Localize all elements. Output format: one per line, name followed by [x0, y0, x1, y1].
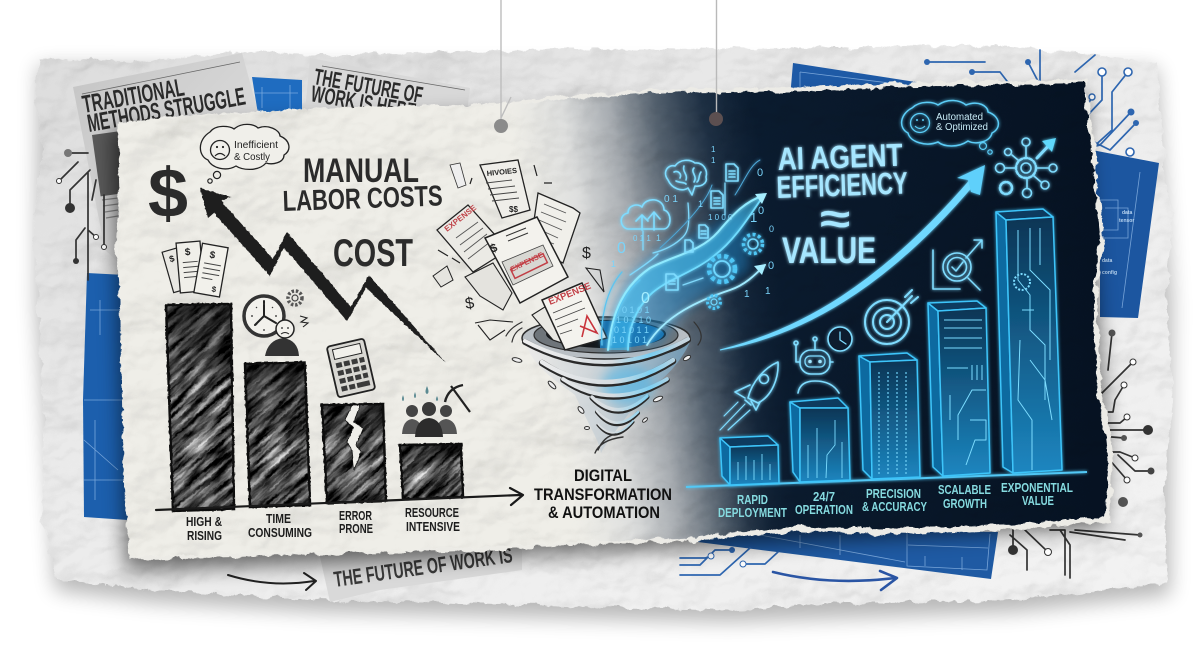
binary digits	[611, 145, 774, 345]
newspaper: bottom future of work: THE FUTURE OF WORK IS	[332, 542, 514, 592]
thought bubble: inefficient and costly: Inefficient	[234, 140, 278, 151]
newspaper: the future of work is here: THE FUTURE OF	[312, 63, 425, 108]
hanging string and pin: right	[709, 0, 723, 126]
bar labels: GROWTH	[943, 496, 987, 511]
paper: invoice	[480, 160, 530, 218]
bar labels	[718, 480, 1073, 520]
binary digits: 1 0 1 0 1	[612, 335, 647, 345]
binary digits: 1	[698, 199, 703, 209]
bar labels: RAPID	[737, 492, 768, 507]
binary digits: 0 1	[664, 194, 678, 205]
funnel debris	[512, 354, 691, 430]
paper: behind funnel expense	[532, 305, 568, 345]
binary digits: 0 1 0 1	[622, 305, 650, 315]
axis labels: RISING	[187, 528, 222, 543]
blueprint: top middle	[252, 77, 302, 114]
tornado funnel	[506, 317, 701, 453]
binary digits: 1 0 1 1 0	[616, 315, 651, 325]
paper: plain document	[530, 193, 580, 263]
icon: cloud upload	[621, 200, 670, 230]
paper: center expense table: $	[488, 240, 500, 256]
binary digits: 1	[656, 233, 661, 243]
binary digits: 1	[611, 259, 616, 269]
binary digits: 1 0 0 0	[708, 213, 733, 222]
funnel rings	[506, 322, 701, 453]
arrow: bottom blue	[773, 571, 897, 590]
icon: dollar small left: $	[464, 295, 476, 313]
icon: receipts: $	[184, 247, 191, 258]
title: ai agent efficiency value: EFFICIENCY	[776, 165, 908, 205]
blueprint: right: data	[1102, 258, 1112, 264]
axis labels	[186, 505, 460, 543]
bar: precision and accuracy	[859, 353, 920, 479]
thought bubble: automated and optimized: & Optimized	[936, 122, 988, 133]
circuit traces: bottom blue	[680, 547, 778, 575]
axis labels: HIGH &	[186, 514, 222, 529]
icons: documents	[666, 164, 738, 290]
paper: center expense table	[485, 217, 568, 303]
binary digits: 0	[768, 260, 774, 272]
blue core glow	[602, 365, 654, 405]
newspaper: the future of work is here: WORK IS HERE	[309, 80, 418, 124]
circuit traces: left	[56, 149, 106, 280]
axis line	[686, 472, 1087, 487]
newspaper: traditional methods struggle: METHODS STRUGGLE	[85, 83, 248, 138]
label: digital transformation and automation: DIGITAL	[574, 466, 632, 485]
axis labels: PRONE	[339, 521, 373, 536]
stream arrowheads	[755, 193, 767, 204]
title: manual labor costs: MANUAL	[303, 152, 419, 190]
icon: magnifier analytics	[933, 240, 982, 290]
icon: calculator	[327, 338, 375, 398]
paper: invoice: HIVOIES	[486, 166, 517, 178]
thought bubble: automated and optimized: Automated	[936, 112, 983, 123]
main paper shadow	[112, 90, 1108, 570]
bar chart: manual labor costs	[154, 302, 524, 540]
paper: behind	[465, 263, 512, 310]
bar: exponential value	[996, 209, 1062, 473]
papers: falling invoices and expenses	[433, 160, 607, 350]
funnel rim	[522, 317, 690, 359]
newspaper: traditional methods struggle: TRADITIONAL	[80, 73, 186, 119]
binary digits: 0	[617, 240, 626, 257]
binary digits: 0 1 0 1 1	[614, 325, 649, 335]
blueprint: top right	[790, 63, 935, 98]
bar: scalable growth	[928, 301, 990, 476]
icon: ai network with arrow	[996, 138, 1057, 198]
icon: receipts	[162, 241, 228, 297]
arrow: bottom black	[228, 573, 316, 590]
bar labels: VALUE	[1022, 493, 1054, 508]
funnel body	[526, 342, 690, 453]
blueprint: left	[83, 273, 128, 520]
thought bubble: automated and optimized	[902, 100, 998, 154]
blueprint: bottom	[680, 528, 998, 579]
bar: rapid deployment	[720, 436, 779, 485]
title: ai agent efficiency value	[776, 137, 908, 271]
icon: target with dart	[865, 290, 918, 344]
icon: receipts: $	[168, 253, 176, 264]
bar: 24/7 operation	[790, 398, 850, 482]
stream glow backdrop	[604, 205, 750, 350]
title: manual labor costs: LABOR COSTS	[282, 180, 443, 218]
icons: gears	[708, 234, 762, 308]
icon: dollar sign: $	[148, 154, 188, 232]
bar chart: ai value	[686, 209, 1087, 520]
label: digital transformation and automation	[534, 466, 672, 522]
paper: invoice: $$	[509, 205, 518, 214]
binary digits: 0	[757, 167, 763, 179]
stream lines	[602, 160, 765, 350]
bar: resource intensive	[398, 442, 465, 501]
icon: receipts: $	[209, 250, 216, 262]
stream band	[608, 195, 764, 350]
icon: receipts: $	[211, 285, 217, 294]
title: ai agent efficiency value: ≈	[820, 195, 850, 242]
binary digits: 0 1 1	[633, 234, 651, 243]
icon: workers with pickaxe	[402, 385, 470, 437]
icon: rocket	[720, 362, 778, 430]
panel: main torn paper edge	[116, 79, 1113, 560]
binary digits: 1	[711, 145, 716, 154]
axis labels: CONSUMING	[248, 525, 312, 540]
bar: error prone	[320, 402, 388, 505]
circuit traces: right dark	[1008, 330, 1154, 578]
axis arrow	[156, 488, 523, 510]
binary digits: 1	[744, 289, 750, 300]
title: ai agent efficiency value: AI AGENT	[777, 137, 904, 177]
bar labels: OPERATION	[795, 502, 853, 517]
binary digits: 0	[641, 290, 650, 307]
label: digital transformation and automation: & AUTOMATION	[548, 503, 660, 522]
icon: brain	[666, 160, 706, 195]
bar labels: DEPLOYMENT	[718, 505, 787, 520]
binary digits: 0	[758, 205, 764, 217]
blueprint: right: config	[1102, 270, 1117, 276]
blueprint: right: data	[1122, 210, 1132, 216]
paper: expense bottom	[542, 281, 607, 350]
axis labels: INTENSIVE	[406, 519, 460, 534]
axis labels: RESOURCE	[405, 505, 459, 520]
paper: expense bottom: EXPENSE	[547, 281, 593, 308]
paper: expense left: EXPENSE	[443, 203, 479, 234]
bar labels: SCALABLE	[938, 482, 991, 497]
bar labels: & ACCURACY	[862, 499, 927, 514]
bar labels: EXPONENTIAL	[1001, 480, 1073, 495]
blueprint: right	[1092, 150, 1159, 318]
bar labels: 24/7	[813, 489, 835, 504]
arrow: rising value curve	[720, 165, 985, 350]
hanging string and pin: left	[494, 0, 511, 133]
bar: high and rising	[164, 302, 236, 513]
blueprint: right: tensor	[1119, 218, 1134, 224]
panel: main paper gradient	[110, 80, 1120, 570]
icon: robot with clock	[794, 327, 852, 393]
title: ai agent efficiency value: VALUE	[782, 230, 876, 271]
binary digits: 1	[765, 286, 771, 297]
icon: clock with worried person	[244, 291, 308, 356]
paper: expense left	[437, 203, 500, 272]
axis labels: TIME	[266, 511, 291, 526]
axis labels: ERROR	[339, 508, 372, 523]
circuit traces: top right blue	[924, 50, 1139, 156]
heading: cost: COST	[333, 232, 413, 275]
blue data stream	[602, 160, 767, 350]
bar: time consuming	[244, 360, 312, 509]
title: manual labor costs	[282, 152, 443, 218]
thought bubble: inefficient and costly	[200, 124, 289, 183]
label: digital transformation and automation: TRANSFORMATION	[534, 485, 672, 504]
newspaper: bottom future of work	[318, 540, 522, 602]
bar labels: PRECISION	[866, 486, 921, 501]
newspaper: traditional methods struggle	[73, 53, 258, 262]
arrow: zigzag cost trend	[200, 188, 446, 363]
binary digits: 1	[711, 156, 716, 165]
icon: dollar small right: $	[582, 245, 591, 262]
paper scraps	[433, 163, 604, 340]
paper: center expense table: EXPENSE	[509, 250, 545, 274]
thought bubble: inefficient and costly: & Costly	[234, 152, 270, 163]
binary digits: 0	[769, 224, 774, 234]
binary digits: 1	[750, 210, 757, 225]
